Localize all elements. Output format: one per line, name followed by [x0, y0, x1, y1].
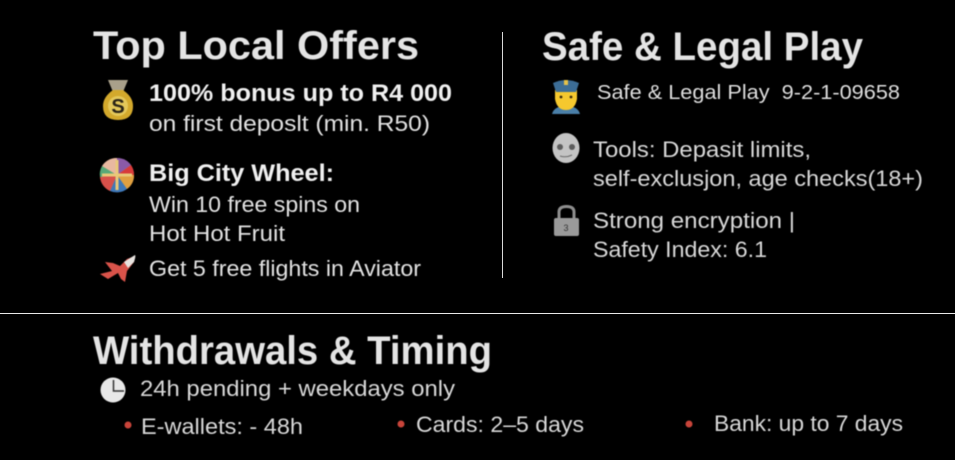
offer: deposit bonus: 100% bonus up to R4 000: [149, 80, 452, 107]
offer: big city wheel: Hot Hot Fruit: [149, 221, 286, 246]
icon: prize wheel: [100, 158, 134, 192]
icon: red plane: [100, 255, 135, 282]
timing: e-wallets: E-wallets: - 48h: [141, 414, 303, 439]
panel: withdrawals and timing: [93, 329, 903, 439]
heading: safe and legal play: Safe & Legal Play: [542, 25, 864, 69]
item: encryption: Strong encryption |: [593, 208, 795, 233]
item: encryption: [554, 206, 795, 262]
icon: grey face: [552, 133, 580, 163]
icon: money bag: [103, 80, 133, 120]
icon: clock: [100, 378, 126, 402]
item: encryption: Safety Index: 6.1: [593, 237, 767, 262]
panel: top local offers: [93, 24, 452, 282]
heading: top local offers: Top Local Offers: [93, 24, 419, 68]
heading: withdrawals and timing: Withdrawals & Timing: [93, 329, 492, 373]
icon: padlock: 3: [563, 223, 569, 233]
offer: big city wheel: [100, 158, 360, 246]
icon: money bag: S: [111, 96, 125, 118]
item: tools: [552, 133, 923, 191]
panel: safe and legal play: [542, 25, 923, 262]
offer: aviator: Get 5 free flights in Aviator: [149, 256, 422, 281]
item: tools: Tools: Depasit limits,: [593, 137, 811, 162]
item: helpline: Safe & Legal Play 9-2-1-09658: [597, 81, 900, 104]
pending note: 24h pending + weekdays only: [140, 376, 456, 401]
icon: police officer: [552, 80, 580, 114]
timing: bank: Bank: up to 7 days: [714, 411, 903, 436]
item: tools: self-exclusjon, age checks(18+): [593, 166, 923, 191]
timing: cards: Cards: 2–5 days: [416, 412, 584, 437]
offer: big city wheel: Win 10 free spins on: [149, 192, 360, 217]
icon: padlock: [554, 206, 579, 236]
offer: big city wheel: Big City Wheel:: [149, 160, 334, 187]
offer: deposit bonus: [103, 80, 452, 136]
item: helpline: [552, 80, 900, 114]
offer: deposit bonus: on first deposlt (min. R50): [149, 111, 430, 136]
